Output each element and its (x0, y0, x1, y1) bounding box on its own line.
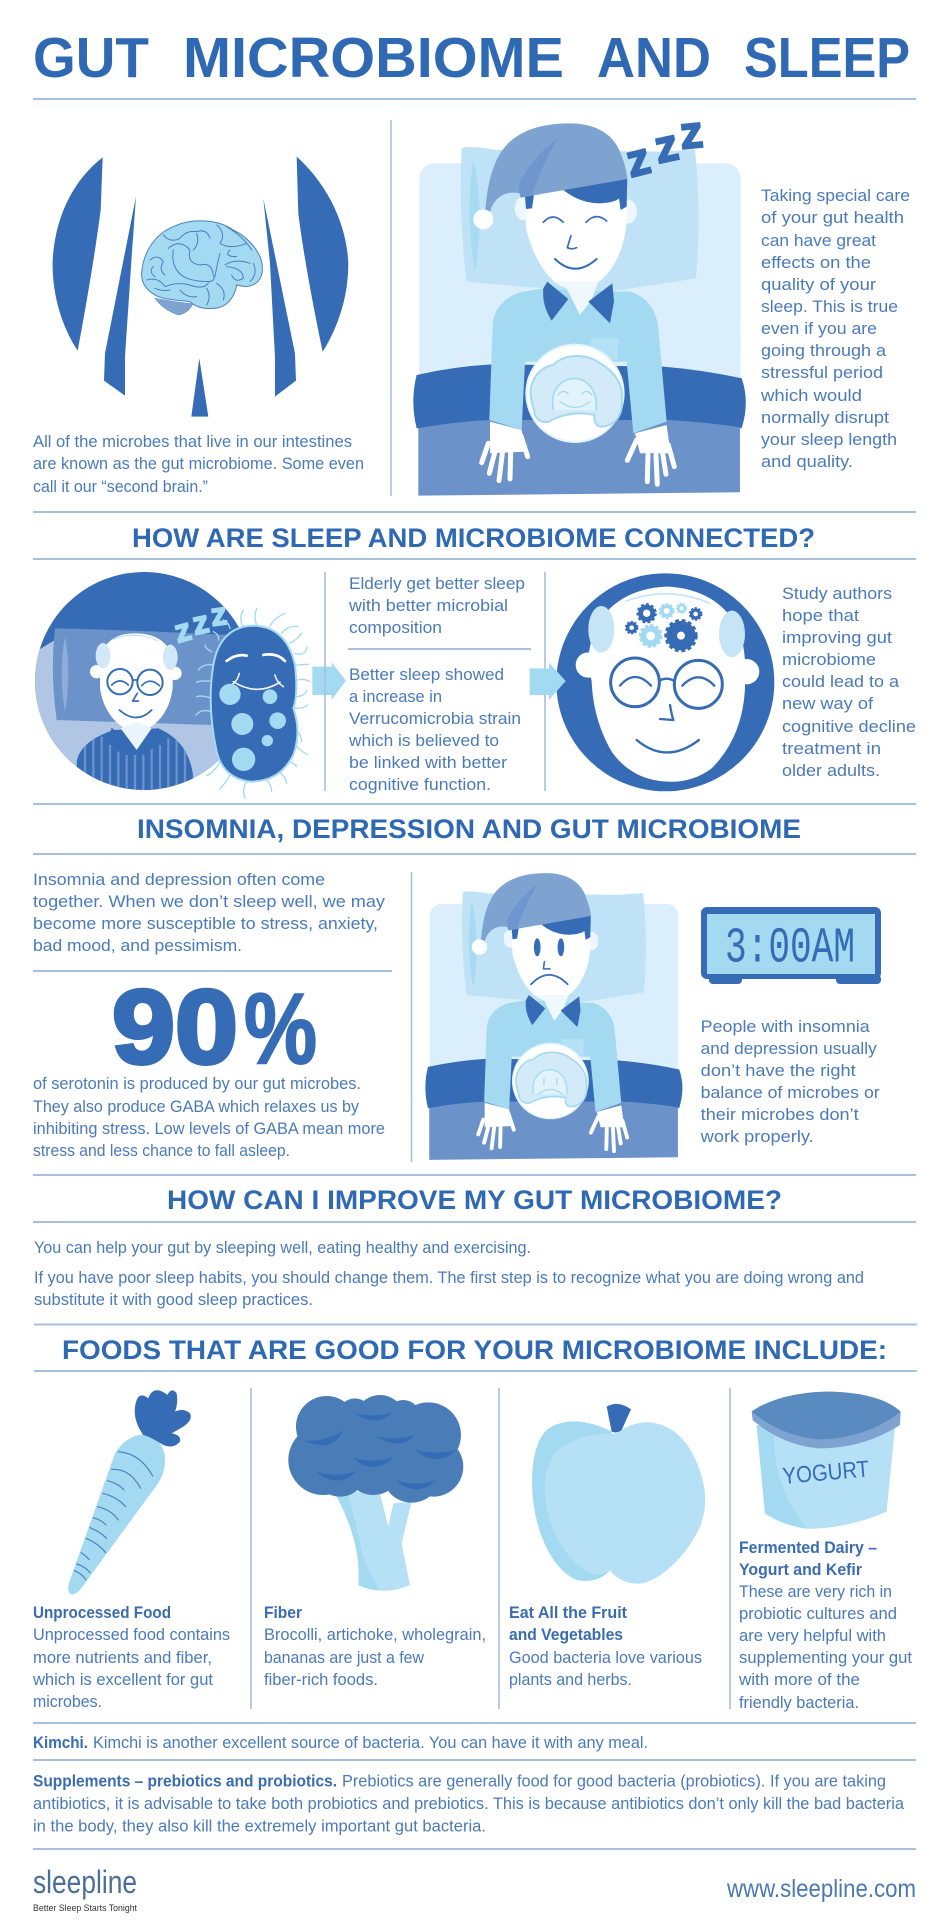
text: insomnia and depression: Insomnia and depression often come (33, 871, 325, 889)
stat: 90 percent: % (244, 973, 317, 1085)
text: elderly better sleep: composition (349, 619, 442, 637)
logo: sleepline: sleepline (33, 1864, 137, 1900)
text: better sleep showed: which is believed to (348, 732, 499, 750)
website url: www.sleepline.com (726, 1875, 916, 1903)
text: supplements: Supplements – prebiotics and probiotics. (33, 1772, 337, 1790)
zzz: Z (680, 117, 704, 156)
text: taking special care: can have great (761, 232, 876, 250)
heading: how are sleep and microbiome connected: HOW ARE SLEEP AND MICROBIOME CONNECTED? (132, 523, 815, 553)
icon: carrot (68, 1390, 191, 1594)
food: fermented dairy: supplementing your gut (739, 1649, 912, 1667)
zzz: Z (625, 144, 653, 184)
icon: broccoli (288, 1395, 463, 1591)
text: people with insomnia: work properly. (700, 1128, 814, 1146)
text: supplements (33, 1772, 905, 1836)
text: supplements: antibiotics, it is advisable to take both probiotics and prebiotics. This is because antibiotics don’t only kill the bad bacteria (33, 1795, 905, 1813)
text: insomnia and depression: together. When we don’t sleep well, we may (33, 893, 386, 911)
icon: brain (142, 221, 262, 315)
text: insomnia and depression: bad mood, and pessimism. (33, 937, 242, 955)
text: taking special care: going through a (761, 342, 887, 360)
text: kimchi: Kimchi. (33, 1734, 88, 1752)
text: taking special care: and quality. (761, 453, 853, 471)
text: study authors: treatment in (782, 740, 881, 758)
text: improve gut advice (34, 1239, 864, 1309)
stat: 90 percent: 90 (112, 969, 238, 1086)
food: fiber (264, 1604, 486, 1689)
icon: alarm clock 3:00AM: 3:00AM (725, 920, 855, 978)
text: better sleep showed: be linked with better (349, 754, 508, 772)
text: study authors: improving gut (782, 629, 892, 647)
text: elderly better sleep (348, 575, 525, 637)
text: insomnia and depression: become more susceptible to stress, anxiety, (33, 915, 378, 933)
title: SLEEP (744, 26, 910, 90)
text: supplements: Prebiotics are generally food for good bacteria (probiotics). If you are taking (342, 1772, 886, 1790)
text: kimchi: Kimchi is another excellent source of bacteria. You can have it with any meal. (93, 1734, 648, 1752)
text: taking special care: Taking special care (761, 187, 910, 205)
text: serotonin: inhibiting stress. Low levels of GABA mean more (33, 1120, 385, 1138)
icon: elderly man sleeping (30, 565, 346, 798)
food: fiber: fiber-rich foods. (264, 1671, 378, 1689)
food: fermented dairy: are very helpful with (739, 1627, 886, 1645)
text: taking special care: your sleep length (761, 431, 897, 449)
title (33, 26, 910, 90)
food: fiber: Fiber (264, 1604, 303, 1622)
icon: torso with brain (53, 157, 348, 417)
text: better sleep showed: a increase in (349, 688, 442, 706)
food: fiber: Brocolli, artichoke, wholegrain, (264, 1626, 486, 1644)
text: taking special care: even if you are (761, 320, 877, 338)
heading: how can I improve my gut microbiome: HOW CAN I IMPROVE MY GUT MICROBIOME? (167, 1185, 782, 1215)
text: taking special care: effects on the (761, 254, 871, 272)
text: study authors: Study authors (782, 585, 892, 603)
food: fermented dairy: Yogurt and Kefir (739, 1561, 863, 1579)
text: serotonin: They also produce GABA which relaxes us by (33, 1098, 360, 1116)
text: people with insomnia: balance of microbes or (701, 1084, 880, 1102)
text: improve gut advice: If you have poor sleep habits, you should change them. The first step is to recognize what you are doing wrong and (34, 1269, 864, 1287)
icon: yogurt cup: YOGURT (781, 1456, 870, 1489)
text: people with insomnia: People with insomnia (701, 1018, 871, 1036)
text: taking special care: which would (760, 387, 862, 405)
zzz (173, 603, 228, 647)
text: serotonin: of serotonin is produced by our gut microbes. (33, 1075, 361, 1093)
gears (626, 604, 701, 650)
text: better sleep showed: Better sleep showed (349, 666, 504, 684)
text: better sleep showed: Verrucomicrobia strain (349, 710, 521, 728)
text: people with insomnia: their microbes don’t (701, 1106, 859, 1124)
text: gut microbiome intro (33, 433, 364, 496)
icon: apple (532, 1404, 705, 1584)
title: MICROBIOME (183, 26, 564, 90)
text: better sleep showed: cognitive function. (349, 776, 491, 794)
text: improve gut advice: You can help your gut by sleeping well, eating healthy and exercising. (34, 1239, 531, 1257)
text: taking special care: of your gut health (761, 209, 904, 227)
text: insomnia and depression (33, 871, 386, 955)
food: fruit and vegetables: Eat All the Fruit (509, 1604, 627, 1622)
food: fruit and vegetables: and Vegetables (509, 1626, 623, 1644)
icon: sleeping man (413, 117, 746, 496)
stat: 90 percent (112, 969, 317, 1086)
zzz (625, 117, 704, 184)
text: elderly better sleep: with better microbial (348, 597, 508, 615)
zzz: Z (210, 603, 228, 631)
text: gut microbiome intro: are known as the gut microbiome. Some even (33, 455, 364, 473)
text: taking special care: normally disrupt (761, 409, 889, 427)
heading: insomnia, depression and gut microbiome: INSOMNIA, DEPRESSION AND GUT MICROBIOME (137, 814, 801, 844)
text: gut microbiome intro: All of the microbes that live in our intestines (33, 433, 352, 451)
zzz: Z (191, 611, 211, 639)
text: study authors: older adults. (782, 762, 880, 780)
food: fermented dairy: with more of the (738, 1671, 860, 1689)
logo: sleepline (33, 1864, 137, 1914)
icon: sad man (425, 873, 682, 1160)
arrow (530, 663, 566, 700)
logo: sleepline: Better Sleep Starts Tonight (33, 1903, 137, 1914)
food: unprocessed food: Unprocessed food contains (33, 1626, 230, 1644)
food: unprocessed food: more nutrients and fiber, (33, 1649, 212, 1667)
zzz: Z (653, 130, 681, 170)
text: study authors (782, 585, 916, 780)
text: people with insomnia: and depression usually (701, 1040, 877, 1058)
icon: yogurt cup (752, 1392, 901, 1529)
text: serotonin: stress and less chance to fall asleep. (33, 1142, 290, 1160)
text: people with insomnia: don’t have the right (701, 1062, 856, 1080)
food: fermented dairy: friendly bacteria. (739, 1694, 859, 1712)
food: unprocessed food (32, 1604, 230, 1711)
text: better sleep showed (348, 666, 521, 794)
icon: elderly head with gears (530, 573, 774, 791)
text: taking special care (760, 187, 910, 471)
title: AND (597, 26, 711, 90)
food: fruit and vegetables (509, 1604, 702, 1689)
text: study authors: new way of (782, 695, 873, 713)
food: fermented dairy: Fermented Dairy – (739, 1539, 877, 1557)
food: fiber: bananas are just a few (264, 1649, 424, 1667)
title: GUT (33, 26, 149, 90)
food: unprocessed food: which is excellent for gut (32, 1671, 213, 1689)
icon: alarm clock 3:00AM (701, 907, 881, 984)
text: taking special care: sleep. This is true (761, 298, 898, 316)
text: study authors: microbiome (782, 651, 876, 669)
food: fruit and vegetables: plants and herbs. (509, 1671, 632, 1689)
text: taking special care: stressful period (761, 364, 883, 382)
arrow (312, 662, 346, 700)
text: study authors: cognitive decline (782, 718, 916, 736)
text: supplements: in the body, they also kill the extremely important gut bacteria. (33, 1818, 486, 1836)
text: people with insomnia (700, 1018, 880, 1146)
text: elderly better sleep: Elderly get better sleep (349, 575, 525, 593)
text: gut microbiome intro: call it our “second brain.” (33, 478, 208, 496)
food: unprocessed food: Unprocessed Food (33, 1604, 171, 1622)
food: fermented dairy: probiotic cultures and (739, 1605, 897, 1623)
heading: foods that are good: FOODS THAT ARE GOOD FOR YOUR MICROBIOME INCLUDE: (62, 1335, 887, 1365)
food: fermented dairy: These are very rich in (739, 1583, 892, 1601)
zzz: Z (173, 618, 193, 647)
food: fermented dairy (738, 1539, 912, 1712)
food: fruit and vegetables: Good bacteria love various (509, 1649, 702, 1667)
text: improve gut advice: substitute it with good sleep practices. (34, 1291, 313, 1309)
text: taking special care: quality of your (761, 276, 877, 294)
text: study authors: hope that (782, 607, 859, 625)
text: serotonin (33, 1075, 385, 1160)
icon: smiling bacterium (196, 608, 310, 798)
food: unprocessed food: microbes. (33, 1693, 102, 1711)
text: study authors: could lead to a (782, 673, 900, 691)
